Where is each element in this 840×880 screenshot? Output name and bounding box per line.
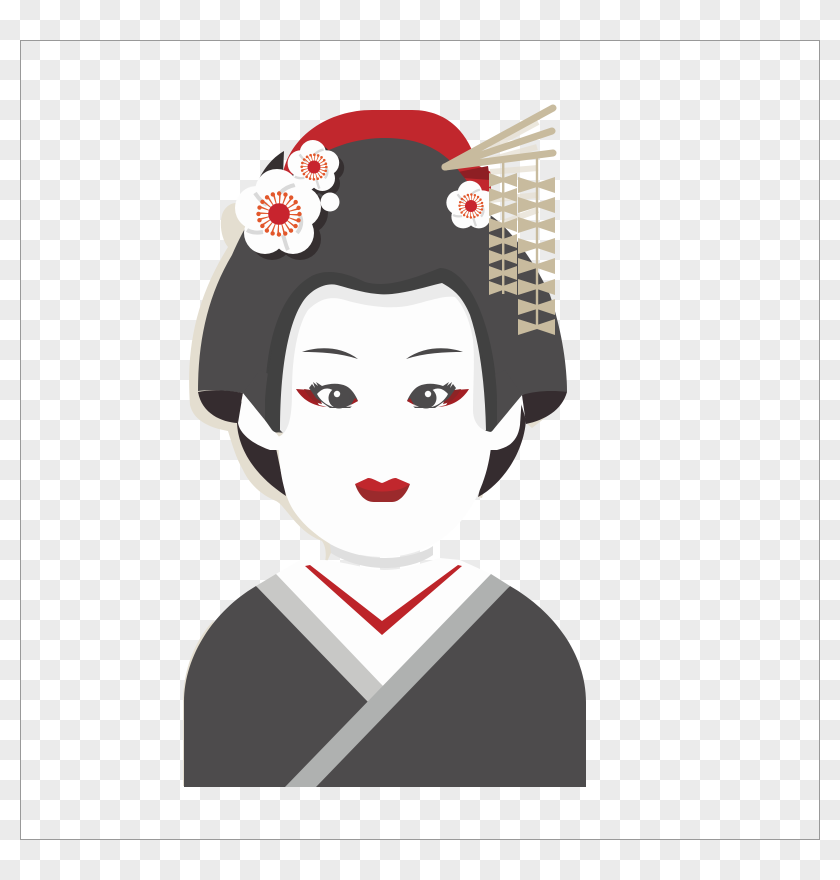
kimono body [184, 586, 586, 787]
red inner collar [305, 565, 462, 635]
cream edges right [478, 414, 550, 498]
hairpin strand right [518, 155, 555, 335]
cream outline behind hair [189, 195, 336, 571]
flower shadow small [293, 145, 344, 196]
lips [355, 478, 410, 502]
eyebrow left [302, 348, 358, 359]
figure [183, 108, 586, 787]
eyebrow right [406, 348, 463, 359]
white bead [320, 192, 340, 212]
red hair ornament band [282, 110, 491, 200]
dark red under ornament [458, 166, 490, 180]
neck hair right [478, 400, 526, 497]
flower shadow large [242, 175, 328, 260]
chin shadow crescent [330, 544, 433, 568]
dark hair lobe left [198, 390, 243, 423]
white under-collar [276, 558, 491, 690]
faded hairpin shadow [490, 122, 538, 222]
dark hairline band [265, 268, 497, 450]
hairpin sticks [445, 108, 553, 167]
cream edge of kimono [183, 620, 214, 786]
right plum flower [446, 181, 495, 228]
hairpin strand left [489, 160, 517, 295]
neck hair left [237, 400, 286, 496]
small plum flower [288, 140, 339, 191]
ear left [238, 393, 290, 450]
hair tips over ears [243, 370, 282, 432]
left collar [256, 574, 383, 702]
face [278, 297, 492, 557]
dark hair behind flowers [256, 151, 284, 190]
eye left [296, 382, 358, 408]
right collar [285, 574, 510, 787]
main hair [198, 138, 567, 440]
ear right [480, 395, 522, 450]
large plum flower [235, 169, 321, 254]
eye right [407, 382, 469, 408]
light skin edge along hairline [280, 283, 486, 470]
dark hair lobe right [522, 391, 567, 424]
